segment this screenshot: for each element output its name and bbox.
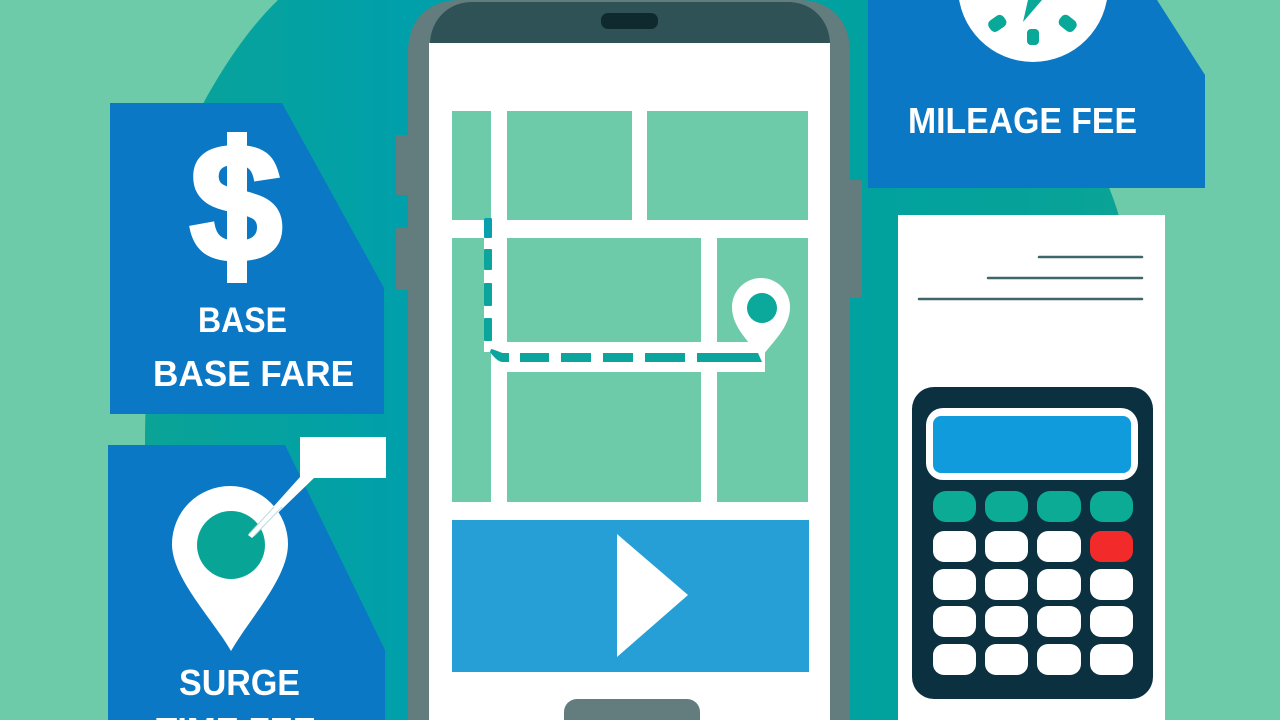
label: base fare: BASE FARE [153,353,354,394]
receipt lines [919,257,1142,299]
map blocks [452,111,808,502]
route dashes [484,218,762,362]
play icon [617,534,688,657]
icon: location pin [172,486,288,651]
phone body [408,0,850,720]
phone screen [429,43,830,720]
label: base: BASE [198,301,287,340]
video panel [452,520,809,672]
icon: dollar sign: $ [189,109,283,297]
map road [484,218,765,372]
teal backdrop shape [145,0,1120,720]
panel: base fare [110,103,384,414]
phone [396,0,862,720]
home button [564,699,700,720]
panel: receipt [898,215,1165,720]
label: mileage fee: MILEAGE FEE [908,100,1137,141]
callout flag [248,437,386,538]
destination pin [732,278,790,358]
calculator display [926,408,1138,480]
panel: surge [108,437,386,720]
icon: calculator [912,387,1153,699]
map [452,111,808,502]
calculator keys [933,491,1133,675]
label: surge: SURGE [179,662,300,703]
phone speaker [601,13,658,29]
phone side buttons [396,135,862,298]
panel: mileage fee [868,0,1205,188]
phone top bar [430,2,830,43]
icon: gauge [958,0,1108,62]
